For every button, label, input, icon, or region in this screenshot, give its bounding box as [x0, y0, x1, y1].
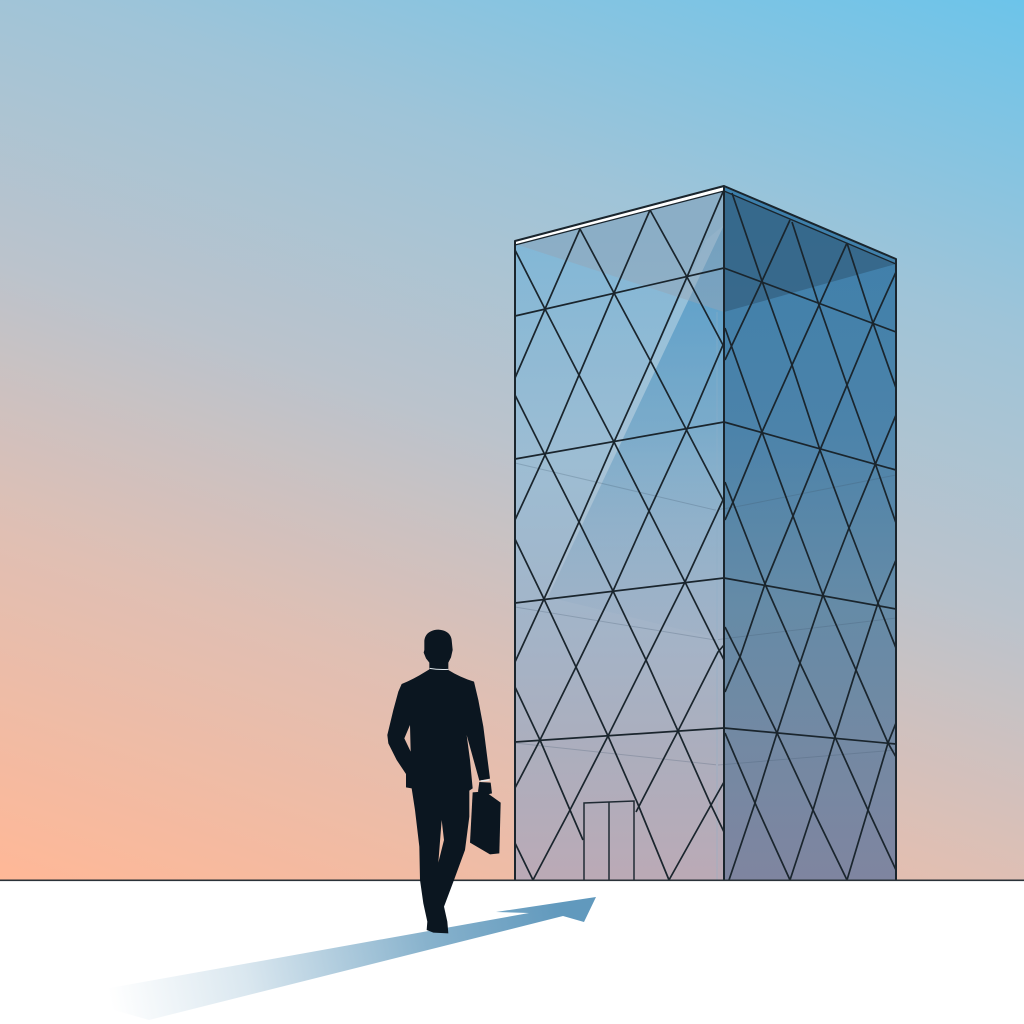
man hand	[478, 782, 492, 795]
ground: white floor	[0, 880, 1024, 1024]
businessman silhouette with briefcase	[387, 630, 501, 933]
facade lattice, right face	[724, 193, 896, 880]
shadow arrow on the ground	[65, 897, 596, 1020]
facade lattice, left face	[515, 192, 724, 880]
tower left face	[515, 186, 724, 880]
shirt collar	[430, 668, 448, 670]
glass tower	[515, 186, 896, 880]
tower door	[584, 801, 634, 880]
faint interior floor lines	[515, 312, 896, 880]
tower right face	[724, 186, 896, 880]
briefcase	[470, 791, 501, 854]
shirt cuff	[481, 780, 489, 781]
horizon line	[0, 880, 1024, 881]
glass reflection on left face	[535, 225, 724, 640]
ceiling shadow inside tower	[515, 191, 896, 312]
roof edge white strip	[516, 187, 724, 245]
man body	[387, 630, 490, 933]
tower outline	[515, 186, 896, 880]
